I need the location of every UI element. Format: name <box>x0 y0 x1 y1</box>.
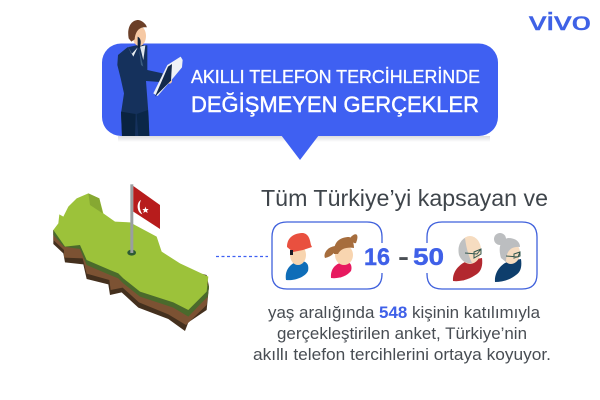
age range panel <box>272 222 537 289</box>
map of Turkey with flag <box>53 184 209 331</box>
logo: vivo: vivo <box>529 8 591 36</box>
map: rock layers <box>53 230 209 331</box>
text: age numbers: - <box>398 244 409 271</box>
businessman holding tablet <box>117 20 183 136</box>
description text: akıllı telefon tercihlerini ortaya koyuyor. <box>253 346 551 364</box>
old age bracket <box>427 222 537 289</box>
flag pole <box>127 184 136 256</box>
icon: boy with red cap <box>286 233 312 280</box>
title: AKILLI TELEFON TERCİHLERİNDE <box>191 67 480 87</box>
title: DEĞİŞMEYEN GERÇEKLER <box>191 92 479 117</box>
description text: gerçekleştirilen anket, Türkiye’nin <box>277 325 527 343</box>
text: age numbers: 50 <box>413 244 444 271</box>
description text: yaş aralığında 548 kişinin katılımıyla <box>268 304 541 322</box>
icon: girl with pigtails <box>324 234 357 278</box>
dotted connector <box>216 256 268 258</box>
map: green surface <box>53 193 208 310</box>
text: age numbers: 16 <box>364 244 390 271</box>
subheading: Tüm Türkiye’yi kapsayan ve <box>261 185 548 211</box>
icon: older woman with bun and glasses <box>494 233 521 282</box>
description text <box>253 304 551 364</box>
Turkish flag <box>133 186 160 229</box>
icon: older man with glasses <box>453 236 482 281</box>
title <box>191 67 480 117</box>
text: age numbers <box>364 244 444 271</box>
speech bubble banner <box>102 44 498 160</box>
young age bracket <box>272 222 382 289</box>
